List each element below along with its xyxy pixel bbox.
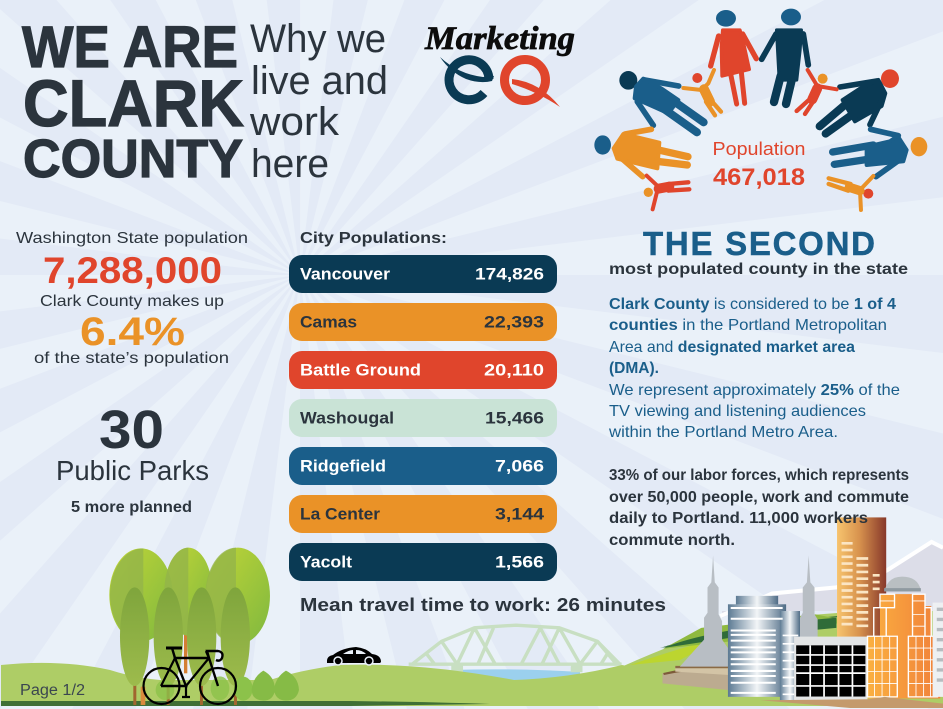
upper left figure	[619, 71, 704, 132]
left figure	[594, 129, 688, 177]
bar: Vancouver	[289, 255, 557, 293]
subtitle: Why we live and work here: Why we	[250, 17, 386, 61]
bar: Camas: Camas	[300, 314, 357, 332]
child figures	[644, 70, 873, 210]
trees	[109, 548, 299, 705]
bar: Battle Ground: 20,110	[484, 362, 544, 380]
bicycle	[144, 648, 236, 704]
body text: Portland metro: within the Portland Metro Area.	[608, 424, 838, 441]
bar: La Center: La Center	[300, 506, 381, 524]
tall tree crowns	[109, 548, 270, 644]
city populations heading: City Populations:	[300, 230, 447, 247]
subtitle: Why we live and work here: work	[249, 100, 340, 144]
bar: Washougal	[289, 399, 557, 437]
body text: labor force: over 50,000 people, work and commute	[609, 489, 909, 506]
body text: Portland metro: We represent approximately 25% of the	[609, 382, 900, 399]
body text: Portland metro: Clark County is considered to be 1 of 4	[609, 296, 896, 313]
orange buildings	[868, 577, 943, 699]
state population stats: of the state’s population	[34, 350, 229, 367]
foreground hills	[1, 663, 700, 706]
subtitle: Why we live and work here: live and	[251, 59, 388, 103]
state population stats: Clark County makes up	[40, 293, 224, 310]
bar: Battle Ground	[289, 351, 557, 389]
state population stats: 7,288,000	[43, 250, 222, 291]
population label	[712, 139, 806, 191]
body text: labor force	[609, 467, 909, 549]
title: We Are Clark County: CLARK	[23, 66, 244, 140]
parks stat: 5 more planned	[71, 499, 192, 516]
black window building	[794, 637, 868, 701]
spire towers	[680, 555, 818, 667]
bar: Vancouver: 174,826	[475, 266, 544, 284]
body text: labor force: commute north.	[609, 532, 735, 549]
body text: Portland metro: TV viewing and listening audiences	[609, 403, 866, 420]
body text: labor force: 33% of our labor forces, which represents	[609, 467, 909, 484]
body text: Portland metro: (DMA).	[609, 360, 659, 377]
population people circle	[594, 9, 927, 210]
subheading: most populated county in the state	[609, 261, 908, 278]
bar: Ridgefield	[289, 447, 557, 485]
body text: Portland metro	[608, 296, 900, 441]
bar: Ridgefield: 7,066	[495, 458, 544, 476]
parks stat	[56, 400, 209, 516]
man figure	[762, 9, 808, 104]
bar: Yacolt	[289, 543, 557, 581]
bar: Yacolt: 1,566	[495, 554, 544, 572]
state population stats: Washington State population	[16, 230, 248, 247]
orange tower	[837, 517, 886, 639]
mountain	[663, 542, 943, 649]
bar: Battle Ground: Battle Ground	[300, 362, 421, 380]
heading: The Second: THE SECOND	[643, 225, 875, 262]
title: We Are Clark County: WE ARE	[22, 15, 238, 80]
subtitle: Why we live and work here: here	[251, 142, 329, 186]
small shrubs	[156, 671, 299, 701]
bar: Washougal: 15,466	[485, 410, 544, 428]
body text: Portland metro: Area and designated market area	[609, 339, 855, 356]
state population stats	[16, 230, 248, 367]
title: We Are Clark County: COUNTY	[23, 129, 243, 189]
bridge	[409, 625, 622, 672]
glass tower	[728, 596, 800, 701]
bar: Vancouver: Vancouver	[300, 266, 391, 284]
mean travel time: Mean travel time to work: 26 minutes	[300, 595, 666, 615]
city population bars	[289, 255, 557, 581]
logo: Marketing EQ: Marketing	[424, 21, 575, 57]
state population stats: 6.4%	[80, 310, 185, 354]
population label: 467,018	[713, 164, 805, 191]
foreground dirt	[760, 697, 943, 708]
woman figure	[711, 10, 756, 104]
title: We Are Clark County	[22, 15, 244, 189]
upper right figure	[820, 69, 899, 134]
body text: Portland metro: counties in the Portland Metropolitan	[609, 317, 887, 334]
parks stat: 30	[99, 400, 164, 460]
right figure	[833, 129, 927, 177]
logo: Marketing EQ	[424, 21, 575, 107]
car	[327, 647, 381, 665]
bar: La Center	[289, 495, 557, 533]
bar: La Center: 3,144	[495, 506, 545, 524]
city skyline	[662, 517, 943, 708]
bar: Camas: 22,393	[484, 314, 544, 332]
crown shading	[110, 548, 236, 644]
page number: Page 1/2	[20, 682, 85, 699]
population label: Population	[712, 139, 806, 159]
bar: Washougal: Washougal	[300, 410, 394, 428]
bar: Camas	[289, 303, 557, 341]
landscape ground	[450, 600, 943, 706]
bar: Ridgefield: Ridgefield	[300, 458, 386, 476]
front poplars	[120, 587, 250, 686]
parks stat: Public Parks	[56, 455, 209, 486]
plaza	[662, 666, 729, 690]
body text: labor force: daily to Portland. 11,000 workers	[609, 510, 868, 527]
bar: Yacolt: Yacolt	[300, 554, 353, 572]
subtitle: Why we live and work here	[249, 17, 388, 186]
